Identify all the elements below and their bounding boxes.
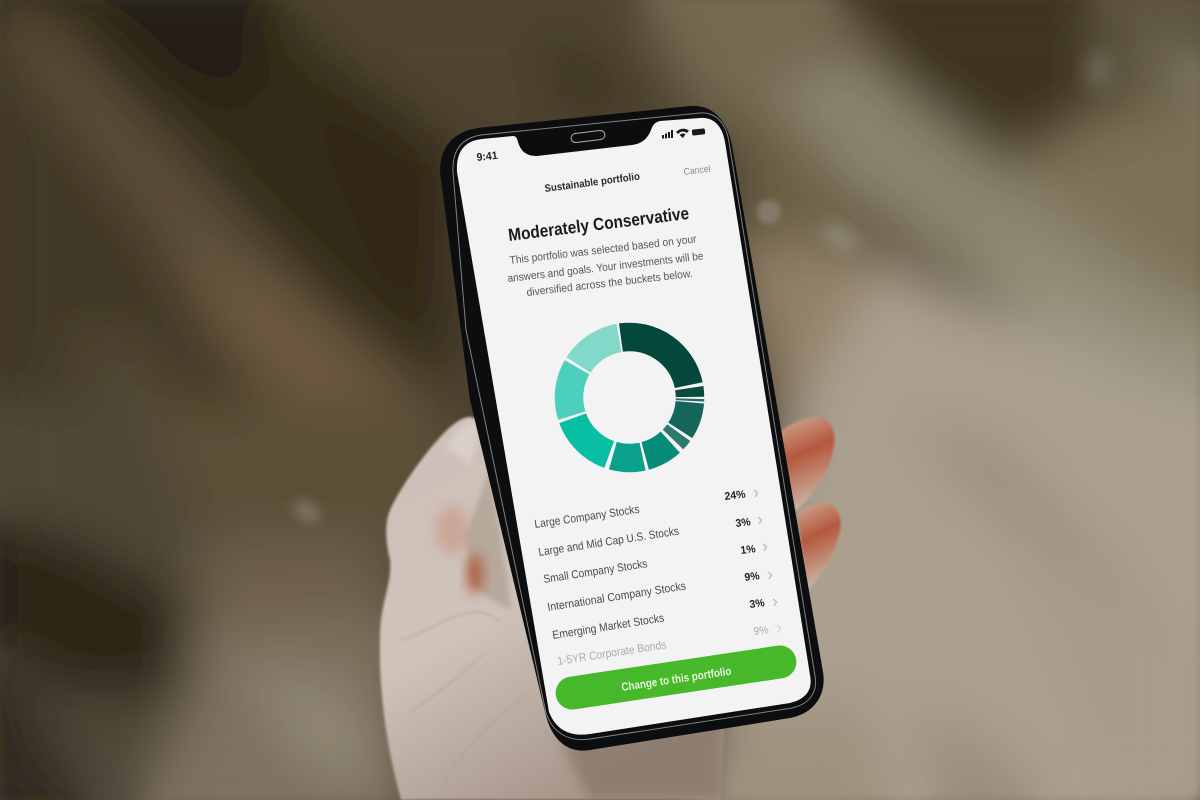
crease red shadow — [467, 554, 483, 594]
allocation list: Large Company Stocks — [534, 504, 641, 531]
nav title: Sustainable portfolio — [544, 171, 641, 195]
allocation list: International Company Stocks — [547, 580, 687, 614]
allocation percentages: 9% — [744, 570, 760, 584]
allocation percentages — [724, 488, 769, 638]
allocation percentages: 3% — [735, 516, 751, 530]
status time: 9:41 — [476, 150, 498, 164]
heading: Moderately Conservative — [507, 203, 690, 245]
allocation list: Small Company Stocks — [543, 558, 648, 586]
button label: Change to this portfolio — [621, 666, 732, 694]
bezel highlight — [453, 113, 816, 740]
phone screen — [457, 118, 811, 735]
allocation list: 1-5YR Corporate Bonds — [557, 639, 667, 668]
allocation percentages: 3% — [749, 597, 765, 611]
palm lines — [400, 612, 525, 790]
description: This portfolio was selected based on your — [509, 233, 697, 267]
thumb web pink shading — [436, 506, 468, 554]
allocation percentages: 24% — [724, 488, 746, 503]
lower palm shadow — [560, 715, 725, 800]
description: answers and goals. Your investments will be — [507, 250, 704, 285]
allocation list: Large and Mid Cap U.S. Stocks — [538, 526, 680, 559]
donut chart — [544, 312, 715, 483]
hand holding the phone — [380, 417, 841, 800]
allocation list: Emerging Market Stocks — [552, 612, 665, 642]
row chevrons — [754, 490, 780, 632]
palm and thumb — [380, 417, 726, 800]
upper finger — [780, 418, 834, 512]
cancel link: Cancel — [683, 164, 711, 178]
allocation percentages: 1% — [740, 543, 756, 557]
status icons — [662, 128, 705, 138]
allocation percentages: 9% — [753, 624, 769, 638]
description — [507, 233, 704, 299]
description: diversified across the buckets below. — [526, 268, 693, 299]
earpiece — [571, 130, 605, 143]
button — [553, 643, 799, 712]
phone body — [440, 106, 824, 751]
lower finger — [797, 503, 841, 590]
allocation list — [534, 504, 687, 668]
inner thumb shading — [463, 470, 512, 610]
thumb pad highlight — [446, 421, 479, 465]
